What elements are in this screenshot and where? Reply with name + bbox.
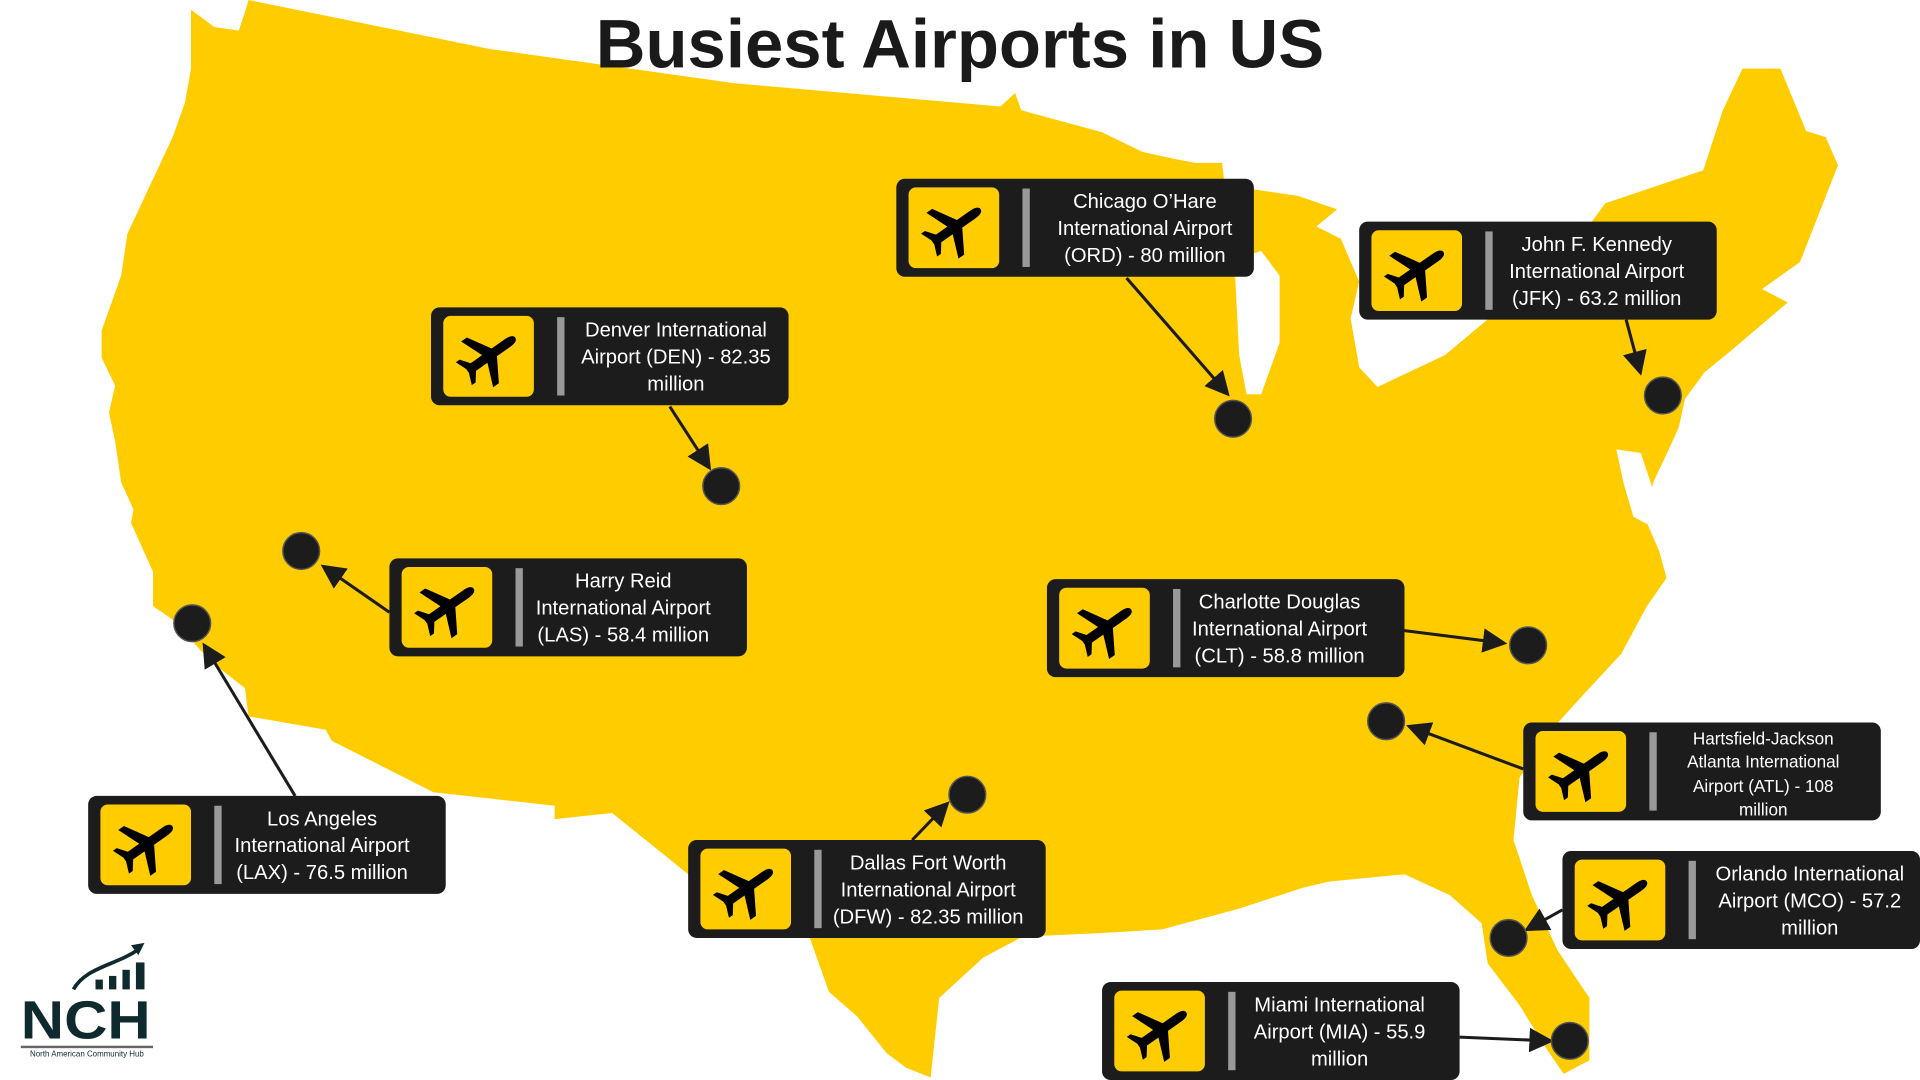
callout: LAX: Los Angeles [267, 808, 377, 830]
callout: LAS: Harry Reid [575, 571, 672, 593]
logo: NCH: NCH [21, 990, 151, 1050]
callout: DFW: Dallas Fort Worth [850, 852, 1007, 874]
callout: ORD: (ORD) - 80 million [1064, 245, 1226, 267]
logo: NCH [21, 943, 153, 1059]
callout: LAX: International Airport [235, 835, 410, 857]
callout: MIA: million [1311, 1048, 1368, 1070]
callout: LAS [389, 558, 747, 656]
callout: CLT: Charlotte Douglas [1199, 592, 1360, 614]
title: Busiest Airports in US [596, 5, 1324, 82]
callout: JFK: (JFK) - 63.2 million [1512, 288, 1681, 310]
callout: ORD [896, 179, 1254, 277]
callout: JFK: International Airport [1509, 261, 1685, 283]
callout: DEN: million [647, 374, 705, 396]
callout: DEN [431, 307, 789, 405]
callout: DFW: International Airport [841, 879, 1016, 901]
callout: LAX: (LAX) - 76.5 million [236, 862, 408, 884]
callout: MIA [1102, 982, 1460, 1080]
callout: CLT: (CLT) - 58.8 million [1195, 645, 1365, 667]
callout: MIA: Airport (MIA) - 55.9 [1254, 1021, 1425, 1043]
callout: DFW [688, 840, 1046, 938]
callout: ATL [1523, 722, 1881, 820]
callout: ATL: Hartsfield-Jackson [1693, 728, 1834, 748]
logo: NCH: North American Community Hub [30, 1050, 144, 1059]
callout: JFK [1359, 222, 1717, 320]
callout: ATL: Airport (ATL) - 108 [1693, 776, 1834, 796]
callout: DFW: (DFW) - 82.35 million [833, 906, 1024, 928]
callout: LAX [88, 796, 446, 894]
callout: MCO: Airport (MCO) - 57.2 [1718, 890, 1901, 912]
callout: MCO: Orlando International [1716, 863, 1904, 885]
callout: MIA: Miami International [1254, 994, 1425, 1016]
callout: LAS: (LAS) - 58.4 million [537, 625, 709, 647]
callout: CLT [1047, 579, 1404, 677]
callout: MCO: million [1781, 917, 1838, 939]
callout: DEN: Denver International [585, 320, 767, 342]
airport dots [174, 377, 1681, 1059]
callout: ORD: Chicago O’Hare [1073, 191, 1217, 213]
callout: CLT: International Airport [1192, 619, 1368, 641]
callout: JFK: John F. Kennedy [1522, 234, 1673, 256]
callout: ATL: Atlanta International [1687, 752, 1839, 772]
callout: ORD: International Airport [1057, 218, 1233, 240]
callout: LAS: International Airport [536, 598, 711, 620]
callout: DEN: Airport (DEN) - 82.35 [581, 347, 771, 369]
callout: ATL: million [1739, 800, 1788, 820]
callout: MCO [1562, 851, 1920, 949]
arrows [206, 278, 1640, 1041]
